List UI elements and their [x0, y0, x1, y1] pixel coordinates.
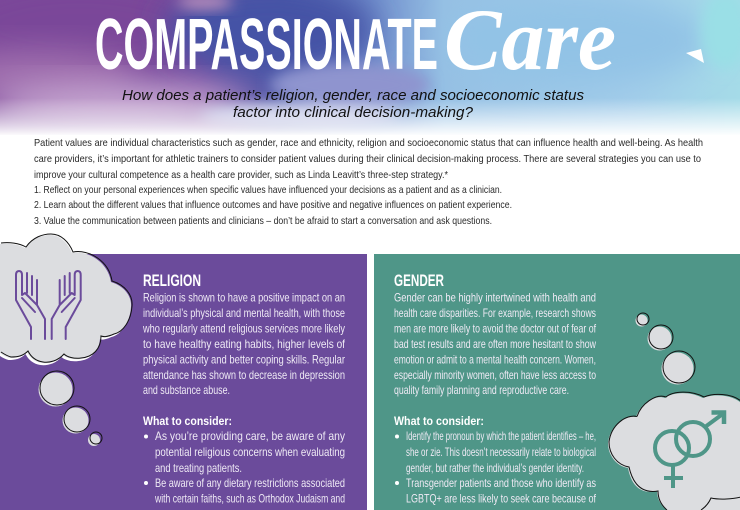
list: religion considerations: Be aware of any dietary restrictions associated: [155, 476, 345, 490]
background: watercolor wash: [0, 0, 740, 140]
list: gender considerations: [395, 429, 596, 506]
text block: religion description: and substance abuse.: [143, 383, 230, 397]
intro text block: 2. Learn about the different values that influence outcomes and have positive and negative influences on patient experience.: [34, 200, 512, 211]
heading: what to consider: What to consider:: [143, 416, 232, 428]
subtitle: How does a patient’s religion, gender, race and socioeconomic status: [122, 87, 584, 104]
list: gender considerations: gender, but rather the individual’s gender identity.: [406, 461, 584, 475]
icon: gender thought cloud: [608, 313, 740, 510]
text block: religion description: [142, 290, 346, 397]
intro text block: improve your cultural competence as a health care provider, such as Linda Leavitt’s three-step strategy.*: [34, 170, 448, 181]
text block: gender description: quality family planning and reproductive care.: [394, 383, 569, 397]
icon: religion thought cloud: [0, 234, 132, 446]
text block: gender description: men are more likely to avoid the doctor out of fear of: [394, 322, 596, 336]
intro text block: 3. Value the communication between patients and clinicians – don’t be afraid to start a conversation and ask questions.: [34, 216, 492, 227]
text block: gender description: health care disparities. For example, research shows: [394, 306, 596, 320]
text block: gender description: [394, 290, 596, 397]
text block: gender description: emotion or admit to a mental health concern. Women,: [394, 352, 596, 366]
list: gender considerations: Transgender patients and those who identify as: [406, 476, 596, 490]
heading: religion: RELIGION: [143, 271, 201, 290]
text block: religion description: Religion is shown to have a positive impact on an: [143, 290, 345, 304]
list: religion considerations: potential religious concerns when evaluating: [155, 445, 345, 459]
subtitle: factor into clinical decision-making?: [233, 104, 474, 121]
list: religion considerations: with certain faiths, such as Orthodox Judaism and: [154, 492, 345, 506]
list: religion considerations: [144, 429, 345, 506]
text block: religion description: attendance has shown to decrease in depression: [143, 368, 345, 382]
heading: gender: GENDER: [394, 271, 444, 290]
list: gender considerations: LGBTQ+ are less likely to seek care because of: [406, 492, 596, 506]
icon: gender symbols: [655, 412, 724, 488]
text block: gender description: Gender can be highly intertwined with health and: [394, 290, 596, 304]
list: religion considerations: and treating patients.: [155, 461, 242, 475]
list: religion considerations: As you’re providing care, be aware of any: [155, 429, 345, 443]
intro text block: 1. Reflect on your personal experiences when specific values have influenced your decisions as a patient and as a clinician.: [34, 185, 502, 196]
text block: gender description: bad test results and are often more hesitant to show: [394, 337, 596, 351]
icon: thought bubbles: [636, 313, 695, 384]
intro text block: [34, 138, 703, 227]
icon: thought bubbles: [38, 371, 102, 446]
text block: religion description: to have healthy eating habits, higher levels of: [143, 337, 346, 351]
heading: what to consider: What to consider:: [394, 416, 484, 428]
text block: gender description: especially minority women, often have less access to: [394, 368, 596, 382]
list: gender considerations: Identify the pronoun by which the patient identifies – he,: [406, 429, 596, 443]
subtitle: [122, 87, 584, 121]
panel: religion: [0, 254, 367, 510]
text block: religion description: who regularly attend religious services more likely: [142, 322, 345, 336]
list: gender considerations: she or zie. This doesn’t necessarily relate to biological: [406, 445, 596, 459]
panel: gender: [374, 254, 740, 510]
text block: religion description: individual’s physical and mental health, with those: [143, 306, 345, 320]
text block: religion description: physical activity and better coping skills. Regular: [143, 352, 345, 366]
icon: open hands: [16, 271, 81, 339]
title: COMPASSIONATE: [95, 5, 438, 85]
